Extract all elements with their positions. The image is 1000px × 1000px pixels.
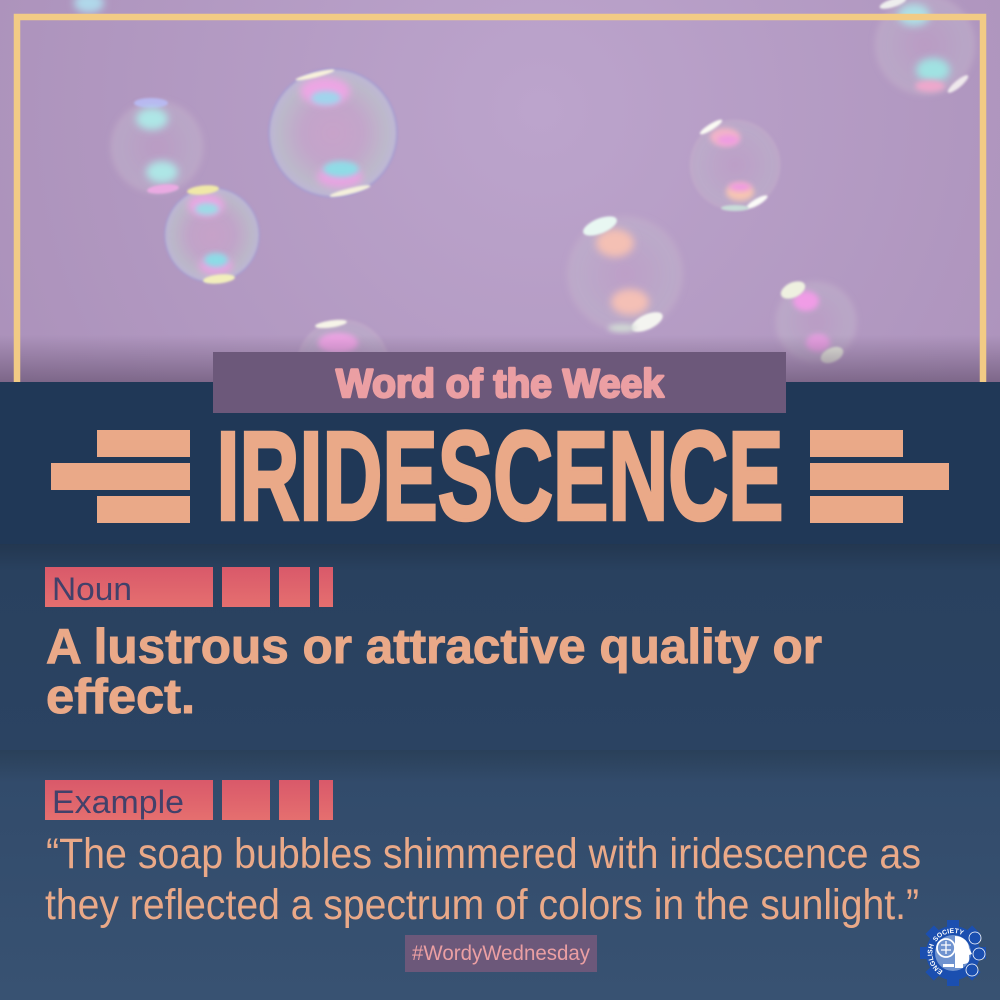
title band	[0, 352, 1000, 546]
bubble centre blurred	[565, 212, 685, 336]
hashtag	[405, 935, 597, 972]
photo bottom fade	[0, 335, 1000, 382]
bubble top left edge	[74, 0, 104, 13]
logo: English Society gear: SOCIETY	[933, 928, 964, 942]
bubble large sharp	[268, 68, 398, 199]
heading box: Word of the Week	[213, 352, 786, 413]
definition text: A lustrous or attractive quality or	[46, 620, 822, 674]
example sentence	[45, 830, 921, 929]
bubble right lower	[774, 278, 858, 366]
logo: English Society gear: ENGLISH	[928, 944, 943, 975]
right stripes icon	[810, 430, 949, 523]
bubble behind heading	[295, 318, 391, 414]
tag: Noun: Noun	[52, 571, 132, 607]
bubble lower left	[164, 184, 260, 285]
definition text: effect.	[46, 670, 195, 724]
gold frame	[17, 17, 983, 382]
bubble left blurred	[109, 98, 205, 195]
background photo: soap bubbles on lilac	[0, 0, 1000, 414]
tag: Noun	[45, 567, 333, 607]
tag: Example	[45, 780, 333, 820]
example sentence: “The soap bubbles shimmered with iridescence as	[46, 830, 921, 878]
bubble top right corner	[873, 0, 977, 97]
example sentence: they reflected a spectrum of colors in the sunlight.”	[45, 881, 919, 929]
panel: definition	[0, 544, 1000, 750]
heading box: Word of the Week: Word of the Week	[336, 362, 665, 406]
left stripes icon	[51, 430, 190, 523]
definition text	[46, 620, 822, 724]
tag: Example: Example	[52, 784, 184, 820]
panel: example	[0, 750, 1000, 1000]
hashtag: #WordyWednesday	[412, 942, 590, 965]
logo: English Society gear	[920, 920, 986, 986]
bubble upper right	[688, 118, 782, 212]
